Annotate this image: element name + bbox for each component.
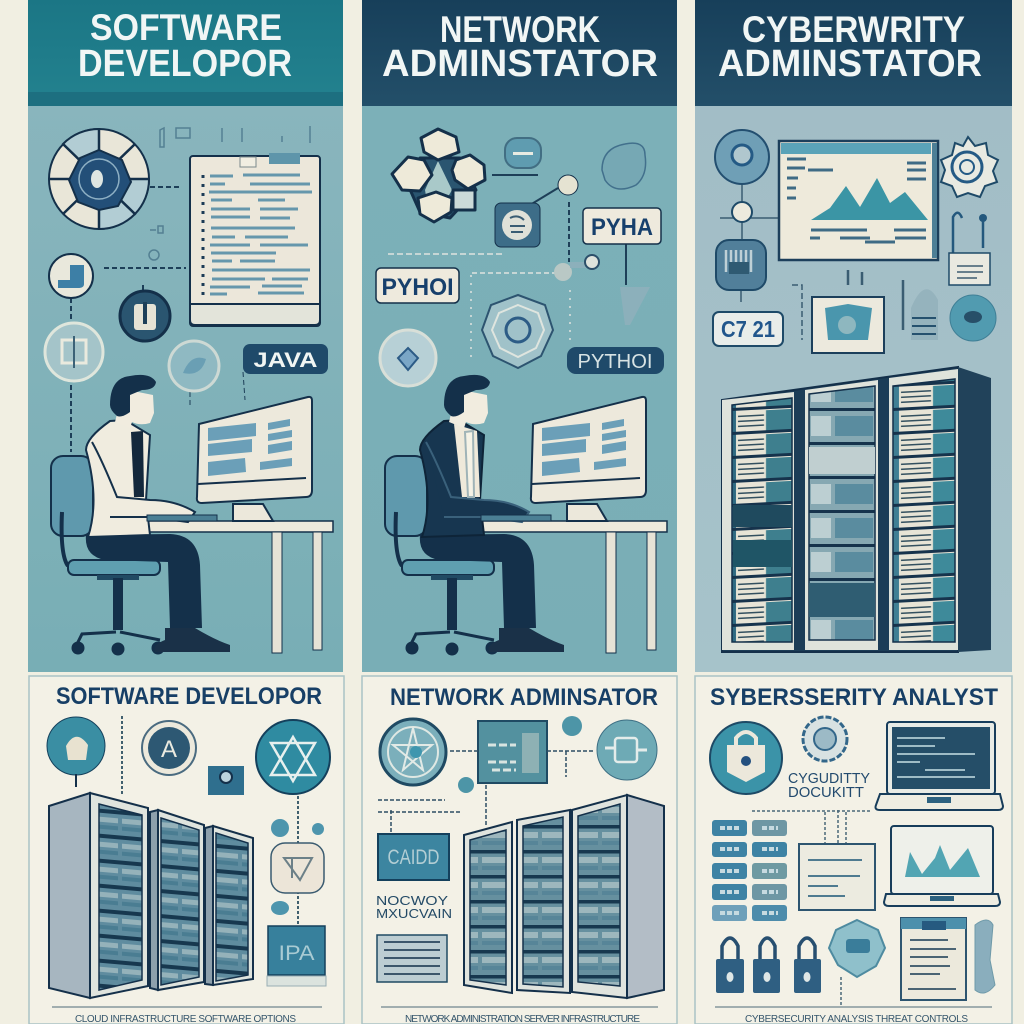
document with code lines <box>190 153 320 326</box>
icon: barcode tile <box>716 240 766 290</box>
illustration panel: developer <box>28 106 343 672</box>
torso and arm <box>86 420 195 537</box>
chair <box>385 456 498 655</box>
button grid <box>712 820 787 921</box>
clipboard <box>901 918 966 1000</box>
heading: software developer banner: DEVELOPOR <box>78 43 292 85</box>
label: c7: C7 21 <box>721 316 775 342</box>
icon: round connector circle <box>597 720 657 780</box>
server rack bank <box>722 367 991 652</box>
icon: segmented wheel <box>49 129 149 229</box>
server racks <box>464 795 664 998</box>
icon: bell badge <box>142 721 196 775</box>
icon: pin sketch <box>620 287 650 325</box>
footer rule <box>715 1006 992 1008</box>
heading: software developer banner: SOFTWARE <box>90 7 282 48</box>
chair <box>51 456 164 655</box>
heading: cybersecurity banner: CYBERWRITY <box>742 9 965 50</box>
laptop: area chart <box>884 826 1000 906</box>
dashboard window with chart <box>779 141 938 260</box>
label: pyha <box>583 208 661 244</box>
rack 2 <box>150 810 204 990</box>
desk <box>145 521 333 653</box>
note panel <box>377 935 447 982</box>
icon: badge left <box>45 323 103 381</box>
panel: lower network administrator <box>362 676 677 1024</box>
desk <box>479 521 667 653</box>
rack 2 <box>517 810 570 993</box>
connector lines <box>71 187 245 452</box>
rack 3 <box>205 826 253 985</box>
icon: small pill <box>505 138 541 168</box>
icon: eye circle <box>950 295 996 341</box>
icon: side device <box>975 920 995 993</box>
icon: small square <box>208 766 244 795</box>
figure: developer at desk <box>51 375 333 655</box>
label: pythoi: PYTHOI <box>578 351 652 373</box>
label: pythoi <box>567 347 664 374</box>
icon: gear <box>941 137 998 197</box>
dashboard screen <box>478 721 547 783</box>
rack 3 <box>572 795 664 998</box>
icon: badge centre <box>169 341 219 391</box>
icon: brain sketch <box>602 143 646 189</box>
label: pyhoi <box>376 268 459 303</box>
icon: small blobs <box>271 819 324 915</box>
icon: monitor with IPA: IPA <box>278 942 314 965</box>
rack 1 <box>49 793 148 998</box>
icon: ring gem <box>380 330 436 386</box>
label: screen tag <box>378 834 449 880</box>
centre bay <box>805 380 878 650</box>
footer rule <box>52 1006 322 1008</box>
heading: lower software developer: SOFTWARE DEVELOPOR <box>56 683 322 710</box>
icon: bell badge: A <box>161 736 177 763</box>
keyboard <box>147 515 217 521</box>
icon: hex badge <box>829 920 885 977</box>
icon: lock nodes <box>554 255 599 281</box>
heading: network administrator banner: NETWORK <box>440 9 600 50</box>
right bay <box>889 369 958 650</box>
icon: dark square with logo <box>495 203 540 247</box>
heading: lower network administrator: NETWORK ADMINSATOR <box>390 684 658 711</box>
icon: security circle <box>715 130 769 184</box>
heading: cybersecurity banner <box>695 0 1012 106</box>
keyboard <box>481 515 551 521</box>
icon: security gear <box>803 717 847 761</box>
monitor <box>531 397 646 521</box>
illustration panel: network <box>362 106 677 672</box>
legs and shoe <box>86 534 230 652</box>
label: screen tag: CAIDD <box>388 846 440 869</box>
label: java <box>243 344 328 374</box>
icon: dark ring <box>120 291 170 341</box>
panel: software developer column <box>28 0 344 1024</box>
panel: network administrator column <box>362 0 677 1024</box>
panel: lower software developer <box>29 676 344 1024</box>
text block: cyber caption: CYGUDITTY <box>788 770 870 787</box>
text block: cyber caption: DOCUKITT <box>788 784 864 801</box>
panel: cybersecurity column <box>695 0 1012 1024</box>
padlock icons <box>716 938 821 993</box>
icon: hook and note <box>949 213 990 285</box>
legs and shoe <box>420 534 564 652</box>
heading: cybersecurity banner: ADMINSTATOR <box>718 43 982 85</box>
rack 1 <box>464 822 512 993</box>
icon: J circle <box>49 254 93 298</box>
label: pyhoi: PYHOI <box>382 274 454 301</box>
text block: network caption <box>376 893 452 921</box>
heading: software developer banner <box>28 0 343 106</box>
framed shield art <box>812 297 884 353</box>
connector lines <box>388 175 626 360</box>
icon: octagon badge <box>482 295 553 368</box>
icon: padlock circle <box>710 722 782 794</box>
heading: network administrator banner <box>362 0 677 106</box>
illustration panel: cybersecurity <box>695 106 1012 672</box>
icon: striped tag <box>911 289 938 340</box>
icon: monitor with IPA <box>267 926 326 986</box>
connector lines <box>720 184 903 340</box>
server racks <box>49 793 253 998</box>
dark jacket and arm <box>420 420 529 537</box>
label: pyha: PYHA <box>591 214 653 241</box>
icon: house circle <box>47 717 105 787</box>
footer rule <box>381 1006 658 1008</box>
head <box>110 375 156 428</box>
icon: small node <box>732 202 752 222</box>
text block: network caption: NOCWOY <box>376 893 448 908</box>
icon: flower network hub <box>392 129 485 222</box>
icon: small blobs <box>458 716 582 793</box>
figure: administrator at desk <box>385 375 667 655</box>
connector lines <box>378 751 595 834</box>
panel: lower cybersecurity <box>695 676 1012 1024</box>
connector lines <box>122 716 298 925</box>
label: java: JAVA <box>254 349 318 372</box>
text block: network caption: MXUCVAIN <box>376 906 452 921</box>
laptop: code screen <box>876 722 1003 810</box>
icon: network star badge <box>380 719 446 785</box>
text block: cyber caption <box>788 770 870 801</box>
label: c7 <box>713 312 783 346</box>
note panel <box>799 844 875 910</box>
icon: star circle <box>256 720 330 794</box>
heading: lower cybersecurity: SYBERSSERITY ANALYST <box>710 684 998 711</box>
head <box>444 375 490 428</box>
connector lines <box>752 810 870 1005</box>
icon: document badge <box>271 843 324 893</box>
faint sketch marks <box>149 126 310 260</box>
left bay <box>722 392 794 650</box>
monitor <box>197 397 312 521</box>
heading: network administrator banner: ADMINSTATOR <box>382 43 658 85</box>
icon: small node <box>558 175 578 195</box>
